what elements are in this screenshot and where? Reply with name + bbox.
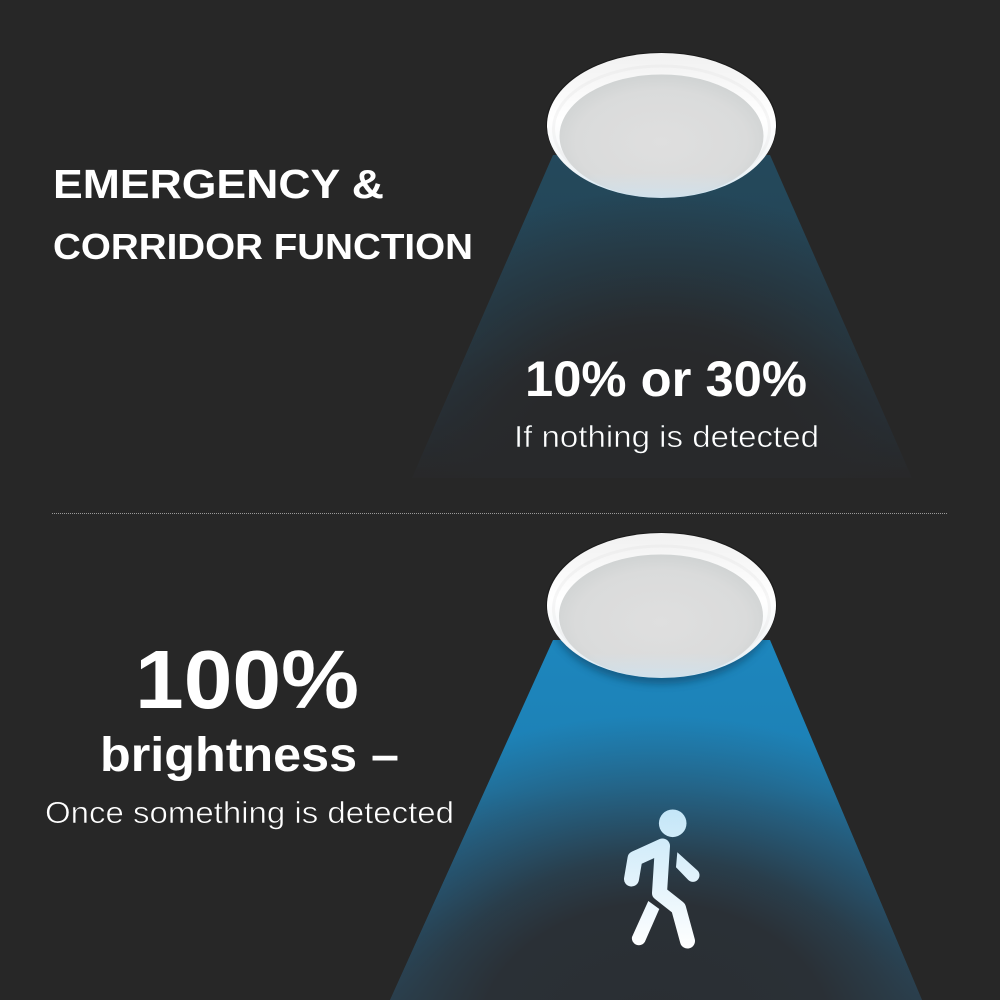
brightness text: 100% — [135, 633, 359, 726]
dim level text: 10% or 30% — [525, 351, 807, 407]
heading — [53, 161, 473, 267]
brightness text — [45, 633, 454, 830]
dim level text — [514, 351, 819, 454]
heading: CORRIDOR FUNCTION — [53, 226, 473, 267]
dim level text: If nothing is detected — [514, 419, 819, 454]
heading: EMERGENCY & — [53, 161, 384, 207]
ceiling lamp: bottom — [546, 532, 777, 678]
brightness text: Once something is detected — [45, 795, 454, 830]
brightness text: brightness – — [100, 729, 399, 782]
ceiling lamp: top — [546, 52, 777, 198]
light beam: dim — [426, 155, 898, 448]
light beam: full — [390, 640, 922, 1000]
icon: walking person — [632, 810, 700, 945]
divider — [52, 512, 948, 514]
